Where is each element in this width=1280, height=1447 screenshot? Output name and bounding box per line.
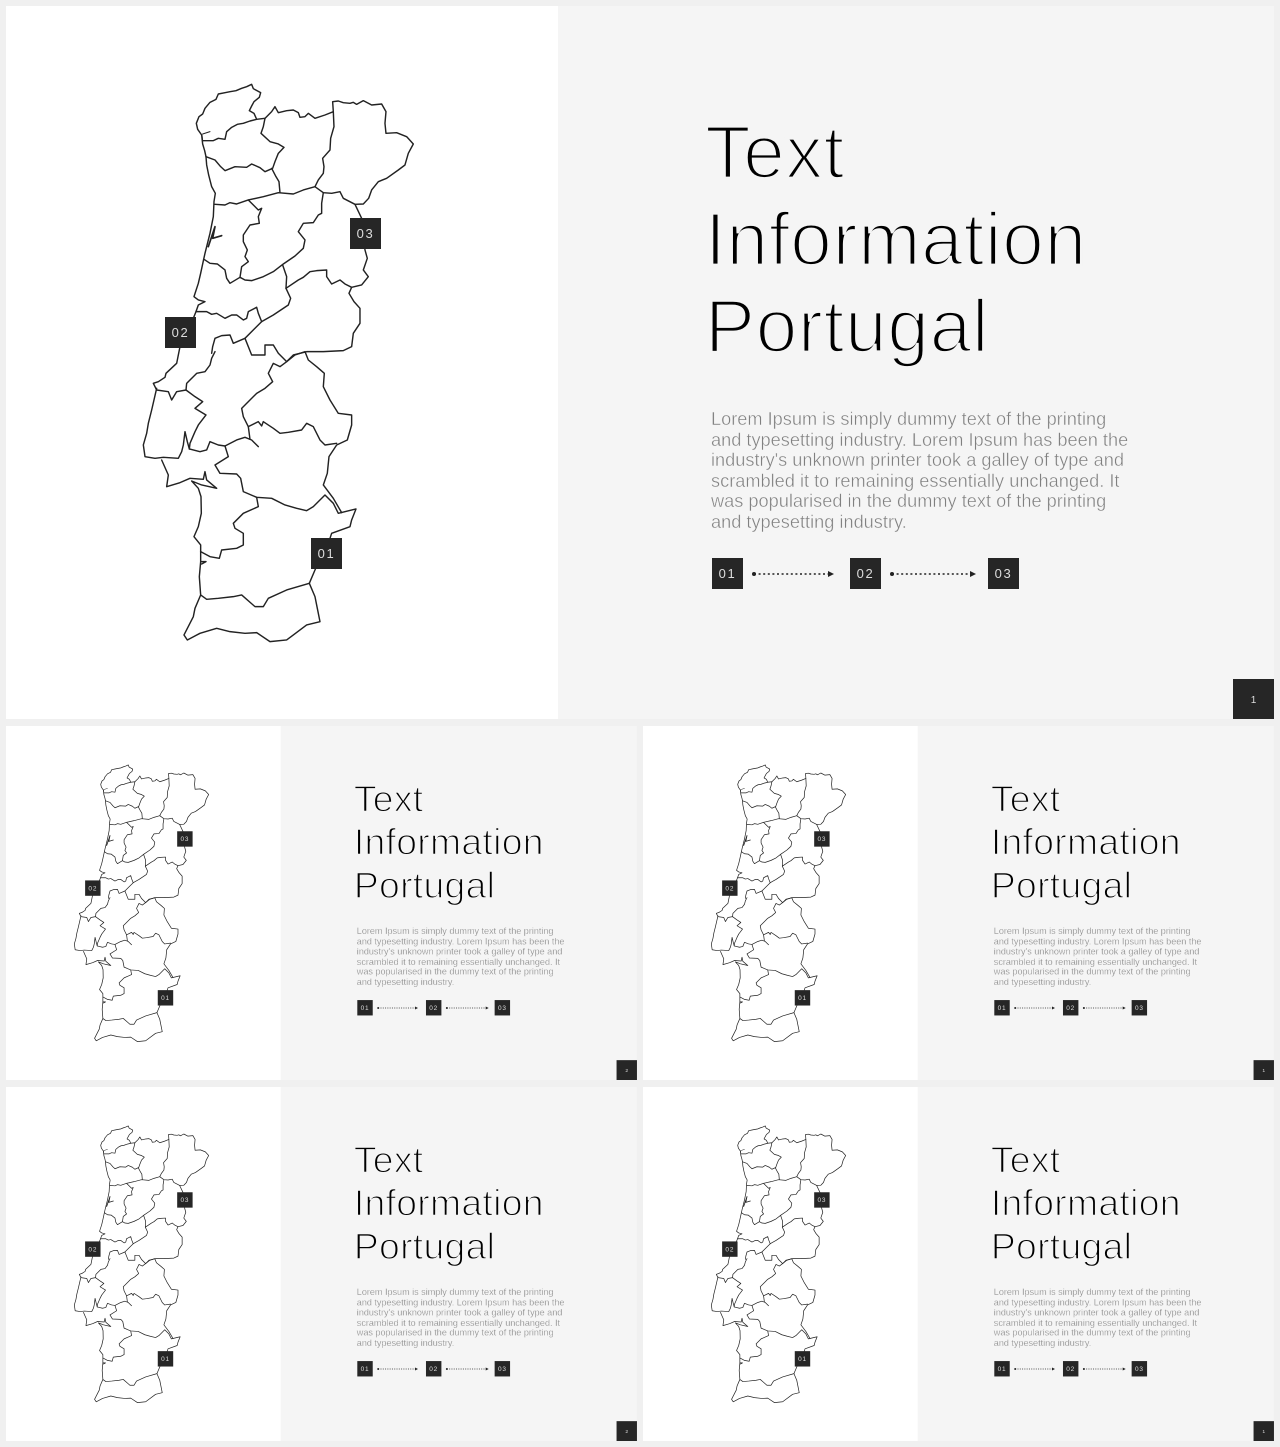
map marker 03: 03: [817, 835, 826, 843]
map marker 01: 01: [161, 1355, 170, 1363]
map of Portugal: [711, 1126, 846, 1403]
legend step 02: [426, 1361, 441, 1376]
page number: 1: [1262, 1068, 1265, 1074]
body text: [356, 1287, 564, 1348]
legend step 01: [357, 1000, 373, 1015]
title: [991, 778, 1181, 906]
title: Portugal: [354, 864, 495, 906]
legend step 01: 01: [719, 566, 736, 581]
legend step 03: 03: [995, 566, 1012, 581]
map marker 03: [350, 218, 381, 249]
legend step 01: 01: [361, 1004, 369, 1011]
body text: and typesetting industry.: [994, 977, 1091, 987]
arrow 01 to 02: [1014, 1368, 1055, 1370]
arrow 02 to 03: [890, 571, 976, 577]
arrow 01 to 02: [1014, 1006, 1055, 1010]
arrow 01 to 02: [377, 1006, 418, 1010]
panel: white map panel: [643, 1087, 918, 1441]
map marker 02: 02: [88, 884, 97, 892]
slide: small slide bottom left: [6, 1087, 637, 1441]
body text: was popularised in the dummy text of the printing: [994, 967, 1191, 977]
title: [991, 1139, 1181, 1267]
arrow 02 to 03: [1082, 1006, 1126, 1010]
legend step 02: 02: [1066, 1365, 1075, 1372]
body text: industry's unknown printer took a galley of type and: [994, 947, 1199, 956]
map marker 03: [177, 1192, 193, 1208]
map of Portugal: [74, 1126, 209, 1403]
body text: and typesetting industry. Lorem Ipsum has been the: [357, 936, 564, 946]
map marker 01: 01: [798, 1355, 807, 1363]
map of Portugal: [74, 764, 209, 1042]
legend step 03: [988, 558, 1019, 589]
legend step 03: 03: [1135, 1004, 1144, 1011]
map marker 02: 02: [172, 325, 189, 340]
body text: and typesetting industry.: [357, 977, 454, 987]
map marker 01: 01: [318, 546, 335, 561]
legend step 01: [994, 1000, 1010, 1015]
body text: [356, 926, 564, 987]
arrow 01 to 02: [752, 571, 834, 577]
title: [354, 1139, 544, 1267]
page number: 1: [1262, 1429, 1265, 1435]
panel: white map panel: [6, 1087, 281, 1441]
body text: [994, 926, 1201, 987]
body text: scrambled it to remaining essentially unchanged. It: [357, 957, 560, 967]
body text: [994, 1287, 1201, 1348]
body text: and typesetting industry.: [357, 1338, 454, 1348]
body text: scrambled it to remaining essentially unchanged. It: [711, 471, 1119, 491]
map marker 02: [85, 1241, 101, 1257]
body text: was popularised in the dummy text of the printing: [357, 967, 554, 977]
map marker 02: 02: [725, 1245, 734, 1253]
panel: white map panel: [6, 6, 558, 719]
map marker 02: 02: [725, 884, 734, 892]
body text: was popularised in the dummy text of the printing: [711, 491, 1106, 511]
legend step 01: 01: [361, 1365, 369, 1372]
body text: and typesetting industry. Lorem Ipsum has been the: [711, 430, 1128, 450]
body text: was popularised in the dummy text of the printing: [994, 1328, 1191, 1338]
title: Information: [705, 197, 1087, 281]
body text: was popularised in the dummy text of the printing: [357, 1328, 554, 1338]
arrow 02 to 03: [446, 1368, 488, 1370]
page number: 2: [625, 1068, 628, 1074]
title: [354, 778, 544, 906]
body text: and typesetting industry. Lorem Ipsum has been the: [994, 1297, 1201, 1307]
map marker 02: [722, 1241, 738, 1257]
slide: small slide top right: [643, 726, 1274, 1080]
body text: and typesetting industry.: [711, 512, 907, 532]
body text: Lorem Ipsum is simply dummy text of the printing: [357, 926, 553, 936]
map of Portugal: [142, 84, 414, 642]
body text: scrambled it to remaining essentially unchanged. It: [357, 1318, 560, 1328]
legend step 02: [850, 558, 881, 589]
body text: Lorem Ipsum is simply dummy text of the printing: [357, 1287, 553, 1297]
body text: Lorem Ipsum is simply dummy text of the printing: [994, 1287, 1190, 1297]
legend step 02: [1063, 1000, 1078, 1015]
page number: 2: [625, 1429, 628, 1435]
title: Information: [354, 821, 544, 863]
legend step 03: 03: [498, 1004, 507, 1011]
arrow 02 to 03: [1082, 1368, 1126, 1370]
legend step 03: [495, 1000, 510, 1015]
title: Text: [991, 778, 1060, 819]
map marker 02: 02: [88, 1245, 97, 1253]
body text: Lorem Ipsum is simply dummy text of the printing: [994, 926, 1190, 936]
title: Portugal: [705, 284, 989, 368]
panel: white map panel: [643, 726, 918, 1080]
map marker 03: [814, 831, 830, 847]
legend step 01: 01: [998, 1004, 1006, 1011]
legend step 03: [1132, 1000, 1147, 1015]
map marker 02: [85, 880, 101, 896]
body text: industry's unknown printer took a galley of type and: [994, 1308, 1199, 1317]
page number: [1254, 1060, 1274, 1080]
map marker 01: [795, 990, 810, 1006]
slide: main large slide: [6, 6, 1274, 719]
legend step 02: 02: [857, 566, 874, 581]
page number: [617, 1060, 637, 1080]
map of Portugal: [711, 764, 846, 1042]
legend step 03: [495, 1361, 510, 1376]
body text: industry's unknown printer took a galley of type and: [357, 947, 562, 956]
body text: scrambled it to remaining essentially unchanged. It: [994, 957, 1197, 967]
page number: [1254, 1421, 1274, 1441]
panel: white map panel: [6, 726, 281, 1080]
map marker 03: 03: [180, 1196, 189, 1204]
title: Portugal: [991, 864, 1132, 906]
map marker 01: [311, 538, 342, 569]
legend step 01: 01: [998, 1365, 1006, 1372]
map marker 01: [158, 990, 173, 1006]
map marker 01: 01: [798, 994, 807, 1002]
map marker 03: 03: [817, 1196, 826, 1204]
legend step 02: 02: [1066, 1004, 1075, 1011]
page number: 1: [1251, 695, 1256, 706]
body text: and typesetting industry.: [994, 1338, 1091, 1348]
legend step 03: 03: [498, 1365, 507, 1372]
title: [705, 110, 1087, 368]
title: Information: [991, 1182, 1181, 1224]
arrow 02 to 03: [446, 1006, 488, 1010]
body text: and typesetting industry. Lorem Ipsum has been the: [994, 936, 1201, 946]
slide: small slide bottom right: [643, 1087, 1274, 1441]
title: Text: [354, 1139, 423, 1180]
title: Text: [354, 778, 423, 819]
map marker 01: [158, 1351, 173, 1367]
title: Text: [705, 110, 845, 194]
title: Information: [991, 821, 1181, 863]
legend step 03: 03: [1135, 1365, 1144, 1372]
body text: and typesetting industry. Lorem Ipsum has been the: [357, 1297, 564, 1307]
page number: [1233, 679, 1274, 719]
body text: industry's unknown printer took a galley of type and: [357, 1308, 562, 1317]
body text: Lorem Ipsum is simply dummy text of the printing: [711, 409, 1106, 429]
legend step 01: [994, 1361, 1010, 1376]
title: Information: [354, 1182, 544, 1224]
legend step 02: 02: [429, 1365, 438, 1372]
title: Portugal: [991, 1225, 1132, 1267]
legend step 01: [712, 558, 743, 589]
slide: small slide top left: [6, 726, 637, 1080]
legend step 02: [1063, 1361, 1078, 1376]
legend step 02: 02: [429, 1004, 438, 1011]
title: Text: [991, 1139, 1060, 1180]
map marker 01: [795, 1351, 810, 1367]
legend step 01: [357, 1361, 373, 1376]
arrow 01 to 02: [377, 1368, 418, 1370]
body text: scrambled it to remaining essentially unchanged. It: [994, 1318, 1197, 1328]
map marker 01: 01: [161, 994, 170, 1002]
map marker 03: [814, 1192, 830, 1208]
map marker 02: [722, 880, 738, 896]
map marker 03: [177, 831, 193, 847]
body text: industry's unknown printer took a galley of type and: [711, 450, 1124, 470]
map marker 03: 03: [180, 835, 189, 843]
legend step 03: [1132, 1361, 1147, 1376]
page number: [617, 1421, 637, 1441]
title: Portugal: [354, 1225, 495, 1267]
map marker 03: 03: [357, 226, 374, 241]
body text: [711, 409, 1128, 532]
legend step 02: [426, 1000, 441, 1015]
map marker 02: [165, 317, 196, 348]
